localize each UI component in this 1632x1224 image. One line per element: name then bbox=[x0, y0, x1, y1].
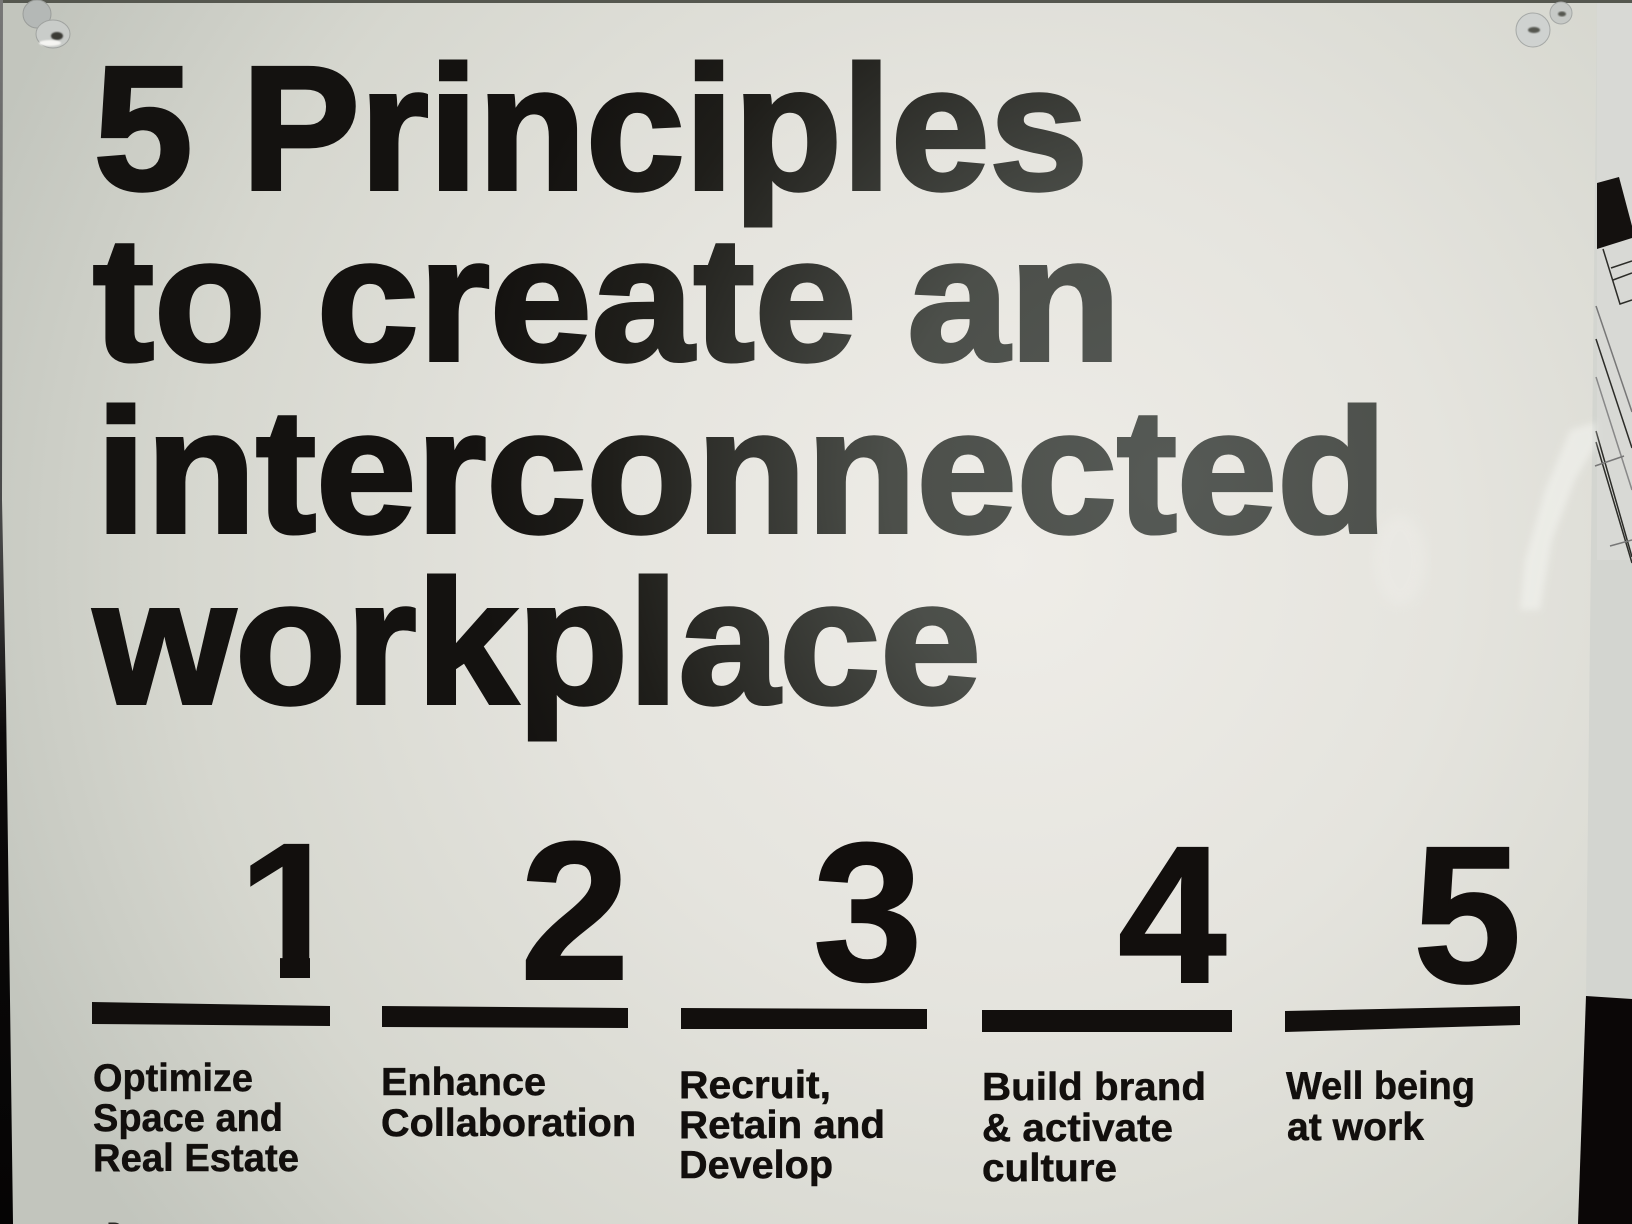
glare on poster bbox=[1374, 422, 1596, 610]
number 3: 3 bbox=[813, 802, 923, 1022]
label 4: Build brand bbox=[982, 1066, 1206, 1109]
title: interconnected bbox=[96, 374, 1387, 570]
label 3: Develop bbox=[679, 1144, 833, 1187]
number 5: 5 bbox=[1413, 806, 1521, 1024]
label 4: culture bbox=[982, 1147, 1117, 1190]
label 5 bbox=[1286, 1065, 1475, 1149]
label 1: Space and bbox=[93, 1097, 283, 1140]
label 1: Optimize bbox=[93, 1057, 253, 1100]
title: 5 Principles bbox=[94, 31, 1088, 227]
left dark edge bbox=[0, 0, 13, 1224]
label 4 bbox=[982, 1066, 1206, 1190]
pin top left bbox=[23, 0, 70, 48]
label 1 bbox=[93, 1057, 299, 1180]
label 3: Recruit, bbox=[679, 1064, 831, 1107]
black block on neighbouring sheet bbox=[1597, 177, 1632, 249]
title: workplace bbox=[93, 545, 981, 741]
label 3: Retain and bbox=[679, 1104, 885, 1147]
line drawing on neighbouring sheet bbox=[1595, 249, 1632, 563]
principle 5 bbox=[1285, 806, 1521, 1149]
bar 2 bbox=[382, 1006, 628, 1028]
bar 3 bbox=[681, 1008, 927, 1029]
title bbox=[93, 31, 1387, 741]
number 1: 1 bbox=[237, 802, 345, 1020]
title: to create an bbox=[93, 202, 1121, 398]
label 5: at work bbox=[1287, 1106, 1424, 1149]
number 4: 4 bbox=[1118, 806, 1226, 1024]
label 2: Enhance bbox=[381, 1061, 546, 1104]
number 2: 2 bbox=[520, 801, 630, 1021]
bar 5 bbox=[1285, 1006, 1520, 1032]
label 3 bbox=[679, 1064, 885, 1187]
top edge strip bbox=[0, 0, 1632, 3]
black panel bottom right bbox=[1578, 996, 1632, 1224]
label 1: Real Estate bbox=[93, 1137, 299, 1180]
label 5: Well being bbox=[1286, 1065, 1475, 1108]
principle 4 bbox=[982, 806, 1232, 1190]
label 4: & activate bbox=[982, 1107, 1173, 1150]
principle 2 bbox=[381, 801, 636, 1145]
label 2: Collaboration bbox=[381, 1102, 636, 1145]
principle 1 bbox=[92, 844, 330, 1172]
neighbouring sheet at right bbox=[1578, 0, 1632, 1224]
pins top right bbox=[1516, 2, 1572, 47]
label 2 bbox=[381, 1061, 636, 1145]
bar 4 bbox=[982, 1010, 1232, 1032]
pins bbox=[23, 0, 1572, 48]
bar 1 bbox=[92, 1002, 330, 1026]
principle 3 bbox=[679, 802, 927, 1187]
